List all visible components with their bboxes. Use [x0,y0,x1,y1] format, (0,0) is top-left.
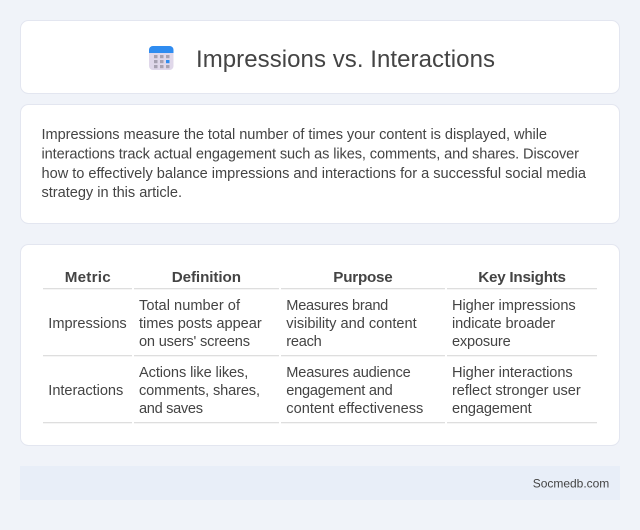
text block: introduction paragraph: Impressions measure the total number of times your content is displayed, while [42,127,547,143]
table row: Interactions: Interactions [48,383,123,399]
table row: Interactions: Actions like likes, [139,365,248,381]
text block: introduction paragraph: interactions track actual engagement such as likes, comments, and shares. Discover [42,146,579,162]
text block: introduction paragraph: strategy in this article. [42,185,182,201]
text block: introduction paragraph [42,127,587,201]
table row: Impressions: Higher impressions [452,298,576,314]
panel: title card [20,20,620,94]
table header row: Key Insights [478,269,566,286]
icon: calendar [149,46,174,70]
panel: comparison table [20,244,620,446]
footer bar [20,466,620,500]
text block: introduction paragraph: how to effectively balance impressions and interactions for a successful social media [42,166,587,182]
table row: Interactions: Higher interactions [452,365,573,381]
footer credit: Socmedb.com [533,476,609,490]
table row: Impressions: Impressions [48,316,127,332]
table row: Impressions: indicate broader [452,316,555,332]
table row: Impressions: times posts appear [139,316,262,332]
table row: Interactions: content effectiveness [286,401,423,417]
table row: Impressions: Measures brand [286,298,388,314]
table row: Impressions [48,298,576,350]
table header row [65,269,566,286]
table row: Interactions [48,365,581,417]
table row: Impressions: reach [286,334,322,350]
table row: Impressions: exposure [452,334,511,350]
table row: Impressions: on users' screens [139,334,250,350]
table row: Interactions: engagement [452,401,532,417]
table row: Impressions: visibility and content [286,316,417,332]
table row: Interactions: Measures audience [286,365,411,381]
table header row: Purpose [333,269,393,286]
table row: Interactions: engagement and [286,383,393,399]
panel: introduction [20,104,620,224]
table row: Interactions: reflect stronger user [452,383,581,399]
table header row: Metric [65,269,111,286]
table row: Interactions: and saves [139,401,203,417]
title: Impressions vs. Interactions [196,46,495,73]
table row: Impressions: Total number of [139,298,241,314]
table header row: Definition [172,269,241,286]
table row: Interactions: comments, shares, [139,383,260,399]
